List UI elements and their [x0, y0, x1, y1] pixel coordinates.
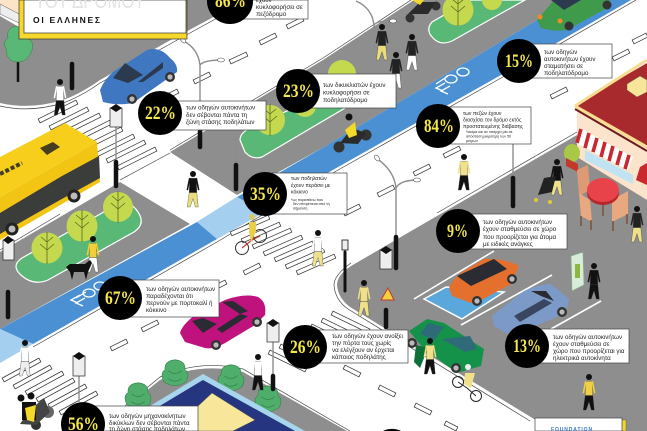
callout: 22%: δεν σέβονται πάντα τη	[186, 112, 248, 119]
bottom building roof	[150, 374, 305, 431]
car: orange in disabled bay	[449, 259, 519, 306]
block: bottom building pavement	[115, 368, 347, 431]
car: magenta	[180, 296, 265, 350]
top-left corner building	[0, 0, 40, 33]
callout: 15%	[497, 39, 612, 83]
block: top-left pavement	[0, 0, 245, 106]
car: green at top	[537, 0, 612, 31]
stroller	[534, 176, 556, 204]
street lamps	[72, 1, 513, 291]
callout: 13%: 13%	[513, 336, 541, 357]
callout: 56%: των οδηγών μηχανοκίνητων	[109, 413, 186, 420]
callout: 26%	[283, 325, 408, 369]
callout: 84%: 84%	[424, 116, 454, 137]
callout: 9%	[436, 209, 567, 253]
callout: 35%: σήμανση	[293, 206, 307, 210]
callout: 56%	[61, 402, 198, 431]
block: parking lot	[337, 95, 647, 431]
callout: 26%: να ελέγξουν αν έρχεται	[332, 347, 395, 354]
callout: 13%: έχουν σταθμεύσει σε	[553, 341, 610, 348]
callout: 84%: διασχίσει τον δρόμο εκτός	[463, 116, 522, 124]
callout: 26%: των οδηγών έχουν ανοίξει	[332, 333, 404, 340]
callout: 23%	[276, 69, 396, 113]
cyclist by green car	[452, 364, 482, 402]
callout: 56%: δικύκλων δεν σέβονται πάντα	[109, 420, 190, 427]
car: blue	[100, 49, 177, 104]
title panel	[19, 0, 187, 39]
callout: 67%: 67%	[105, 288, 136, 309]
callout: 9%: των οδηγών αυτοκινήτων	[483, 219, 552, 226]
callout: 26%: κάποιος ποδηλάτης	[332, 354, 386, 361]
callout: 86%: κυκλοφορήσει σε	[256, 4, 303, 11]
callout: 9%: έχουν σταθμεύσει σε χώρο	[483, 226, 557, 233]
callout: 26%: την πόρτα τους χωρίς	[332, 340, 391, 347]
callout: 35%: δεν επιτρέπεται από τη	[293, 202, 330, 206]
callout: 35%	[243, 172, 347, 216]
callout: 26%: 26%	[290, 337, 321, 358]
road centre dashes	[113, 20, 645, 428]
callout: 67%	[98, 276, 219, 320]
bus	[0, 123, 100, 240]
callout: 35%: 35%	[250, 184, 281, 205]
dog	[66, 260, 92, 280]
block: bus stop pavement	[0, 182, 190, 329]
callout: 67%: παραδέχονται ότι	[146, 293, 193, 300]
callout: 22%: των οδηγών αυτοκινήτων	[186, 104, 255, 112]
callout: 86%: πεζόδρομο	[256, 11, 287, 18]
callout: 9%: που προορίζεται για άτομα	[483, 234, 557, 241]
callout: 9%: 9%	[447, 221, 468, 242]
EV charger	[571, 252, 584, 291]
callout: 15%: σταματήσει σε	[544, 63, 583, 70]
callout: 84%: *ακόμα και αν υπάρχει μία σε	[466, 130, 513, 134]
callout: 13%	[505, 324, 629, 368]
callout: 15%: των οδηγών	[544, 49, 577, 56]
callout: 67%: κόκκινο	[146, 307, 167, 314]
callout: 23%: κυκλοφορήσει σε	[323, 90, 370, 96]
callout: 84%: απόσταση μικρότερη των 50	[466, 134, 511, 138]
green islands	[16, 0, 525, 282]
callout: 35%: των ποδηλατών	[291, 175, 327, 182]
callout: 15%: 15%	[505, 51, 533, 72]
cyclist on crosswalk	[236, 214, 266, 254]
corner restaurant building	[564, 60, 647, 200]
callout: 84%: των πεζών έχουν	[463, 110, 502, 117]
callout: 84%: μέτρων	[466, 139, 478, 143]
car: green with open door	[407, 319, 484, 373]
callout: 23%: 23%	[283, 81, 314, 102]
cycle lane markings	[71, 68, 469, 306]
car: grey-blue	[492, 284, 569, 336]
motorcycles	[18, 0, 440, 430]
subtitle: ΟΙ ΕΛΛΗΝΕΣ	[33, 15, 100, 25]
callout: 13%: ηλεκτρικά αυτοκίνητα	[553, 355, 611, 362]
callout: 13%: χώρο που προορίζεται για	[553, 348, 625, 355]
traffic lights	[3, 104, 394, 402]
source box	[535, 418, 626, 431]
callout: 86%	[207, 0, 308, 24]
callout: 67%: των οδηγών αυτοκινήτων	[146, 286, 215, 293]
trees	[4, 0, 502, 264]
block: upper pavement strip	[170, 0, 570, 195]
callout: 15%: ποδηλατόδρομο	[544, 70, 589, 77]
callout circle cropped at bottom	[383, 429, 401, 431]
callout: 35%: κόκκινο	[291, 188, 308, 196]
cafe table and chairs	[577, 165, 628, 231]
callout: 67%: περνούν με πορτοκαλί ή	[146, 300, 213, 307]
callout: 84%: προστατευμένης διάβασης	[463, 123, 524, 130]
callout: 23%: ποδηλατόδρομο	[323, 97, 368, 104]
callout: 15%: αυτοκινήτων έχουν	[544, 56, 596, 63]
callout: 84%	[416, 104, 531, 148]
callout: 35%: *ως παραπάνω που	[291, 198, 323, 202]
callout: 9%: με ειδικές ανάγκες	[483, 241, 533, 248]
callout: 22%: ζώνη στάσης ποδηλάτων	[186, 119, 254, 126]
callout: 22%: 22%	[145, 103, 176, 124]
callout: 35%: έχουν περάσει με	[291, 182, 331, 189]
callout: 13%: των οδηγών αυτοκινήτων	[553, 334, 622, 341]
shrubs around bottom building	[125, 360, 281, 412]
crosswalks	[5, 103, 367, 412]
callout: 22%	[138, 91, 266, 135]
parking bays	[414, 251, 601, 329]
callout: 23%: των δικυκλιστών έχουν	[323, 82, 385, 89]
